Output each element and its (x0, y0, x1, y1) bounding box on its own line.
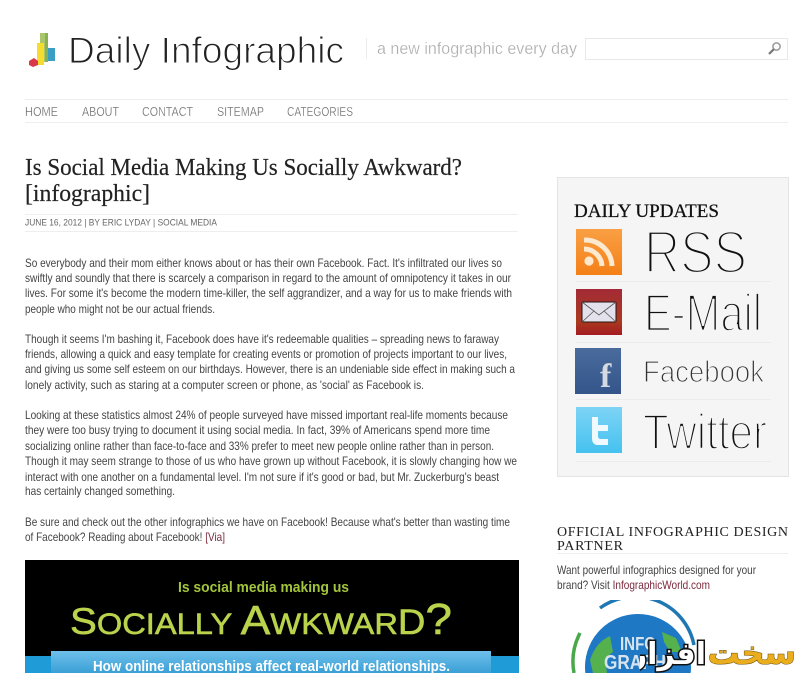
search box (585, 38, 788, 60)
watermark (640, 636, 796, 673)
panel heading: DAILY UPDATES (574, 202, 719, 222)
article title: [infographic] (25, 180, 150, 207)
navigation: HOME (25, 105, 58, 119)
panel: daily updates (557, 177, 789, 477)
partner heading: OFFICIAL INFOGRAPHIC DESIGN (557, 525, 788, 540)
paragraph 4 (25, 516, 510, 544)
paragraph 2: lonely activity, such as staring at a computer screen or phone, as 'social' as Facebook is. (25, 379, 424, 392)
site name: Daily Infographic (68, 30, 344, 71)
paragraph 2 (25, 333, 515, 392)
icon: RSS (576, 229, 622, 275)
navigation: SITEMAP (217, 105, 264, 119)
icon: Facebook: f (600, 358, 612, 394)
icon: bar chart logo (29, 33, 55, 67)
icon: email (576, 289, 622, 335)
infographic preview (25, 560, 519, 673)
navigation (25, 105, 353, 119)
post meta: JUNE 16, 2012 | BY ERIC LYDAY | SOCIAL MEDIA (25, 218, 217, 228)
paragraph 1 (25, 257, 512, 316)
article title (25, 154, 462, 207)
paragraph 3 (25, 409, 517, 498)
infographic preview: SOCIALLY AWKWAR D? (70, 595, 452, 644)
partner logo globe (571, 600, 696, 673)
paragraph 4: of Facebook? Reading about Facebook! [Via] (25, 531, 225, 544)
partner heading (557, 525, 788, 553)
paragraph 3: has certainly changed something. (25, 485, 175, 498)
infographic preview: Is social media making us (178, 579, 349, 596)
navigation: CONTACT (142, 105, 193, 119)
partner text: Want powerful infographics designed for your (557, 564, 756, 577)
partner text (557, 564, 756, 592)
paragraph 1: people who might not be our actual friends. (25, 303, 215, 316)
partner logo globe: INFO (620, 634, 656, 654)
partner text: brand? Visit InfographicWorld.com (557, 579, 710, 592)
navigation: ABOUT (82, 105, 119, 119)
icon: Facebook (575, 348, 621, 394)
icon: Twitter (576, 407, 622, 453)
